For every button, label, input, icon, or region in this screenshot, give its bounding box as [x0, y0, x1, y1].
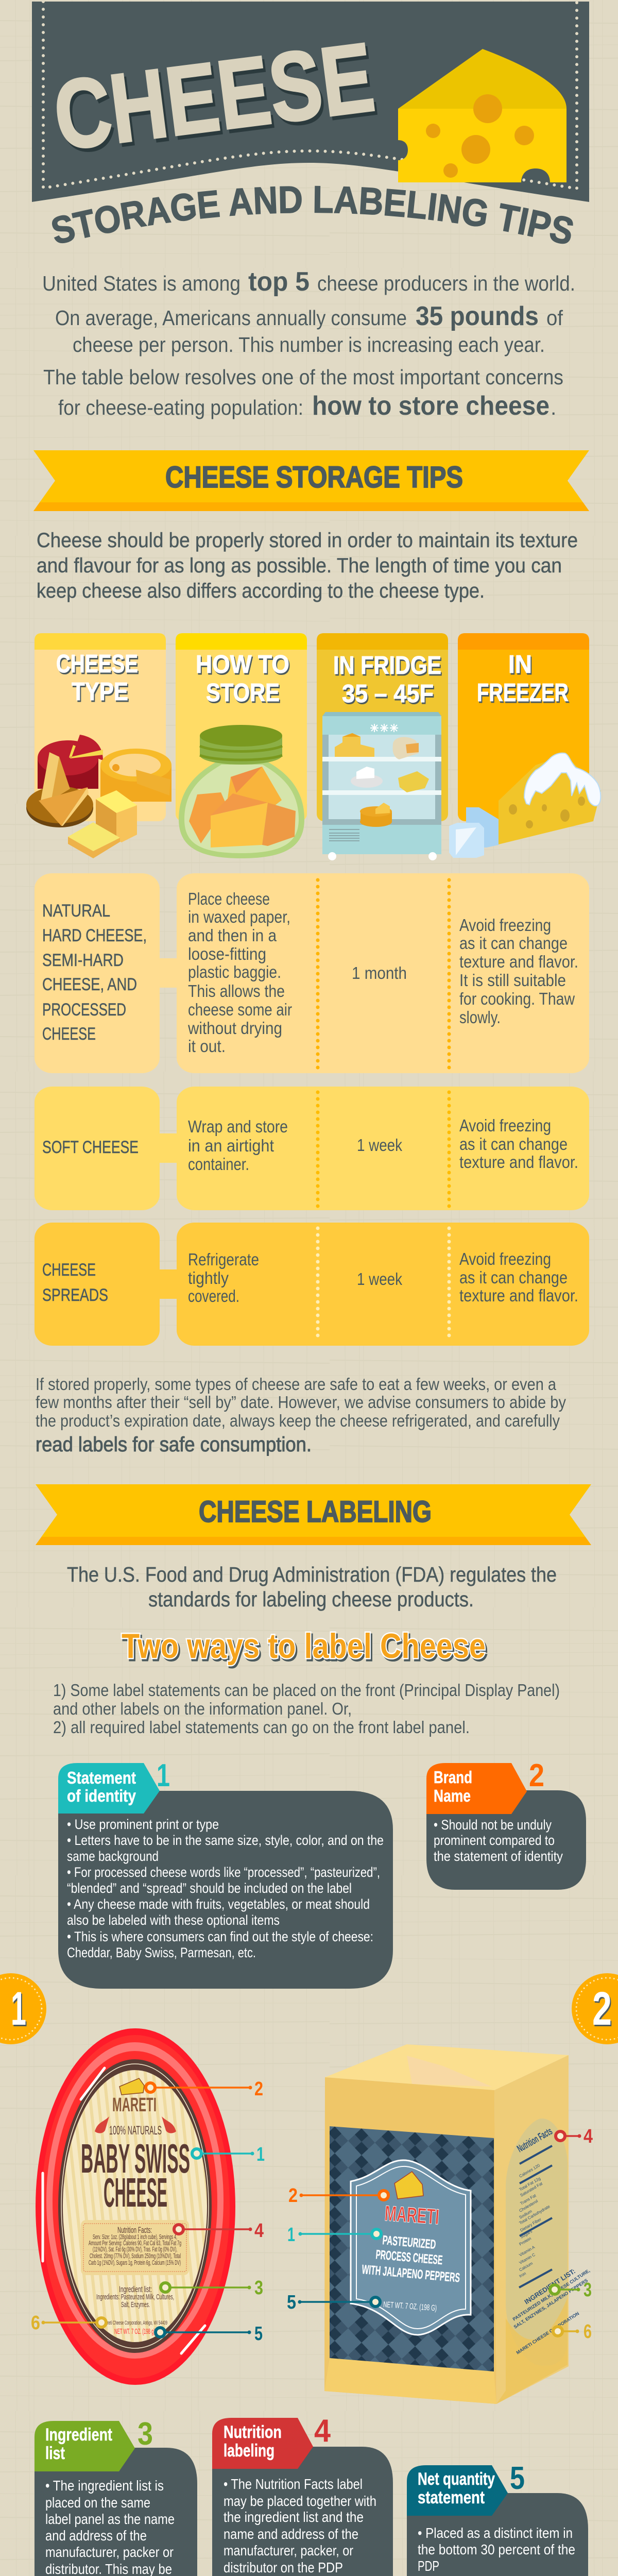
nutrition box: [81, 2220, 189, 2275]
ingredient list: Salt, Enzymes.: [121, 2300, 150, 2309]
body text: [67, 1817, 384, 1960]
markers: cheese block: [287, 2126, 593, 2343]
panel: ingredient list: [35, 2416, 197, 2576]
intro text: cheese producers in the world.: [317, 272, 575, 295]
how to store cell: cheese some air: [188, 1000, 292, 1019]
side panel: nutrition and ingredients: Total Carbohydrate: [518, 2204, 551, 2226]
markers: round label: [31, 2078, 265, 2345]
intro text: how to store cheese: [312, 391, 550, 421]
markers: cheese block: 2: [288, 2185, 298, 2207]
front label: WITH JALAPENO PEPPERS: [361, 2262, 460, 2285]
how to store cell: [188, 1117, 288, 1174]
body text: • Use prominent print or type: [67, 1817, 219, 1832]
nutrition box: Cholest. 20mg (77% DV), Sodium 250mg (10%DV), Total: [90, 2252, 181, 2260]
side panel: nutrition and ingredients: Sodium: [518, 2209, 533, 2220]
how to store cell: covered.: [188, 1286, 239, 1306]
intro text: top 5: [248, 267, 310, 297]
icon: fridge with cheese: [322, 712, 441, 860]
how to store cell: in an airtight: [188, 1136, 274, 1155]
storage paragraph: [37, 529, 578, 602]
100% naturals: [95, 2116, 176, 2138]
tag: Name: [434, 1786, 471, 1805]
side panel: nutrition and ingredients: Calories 120: [518, 2163, 541, 2179]
nutrition box: Amount Per Serving: Calories 90, Fat Cal 63, Total Fat 7g: [89, 2239, 181, 2247]
panel: statement of identity: [58, 1758, 393, 1989]
nutrition box: Nutrition Facts:: [117, 2225, 152, 2235]
panel: nutrition labeling: [212, 2413, 393, 2576]
body text: may be placed together with: [224, 2493, 376, 2509]
freezer cell: Avoid freezing: [459, 916, 551, 935]
body text: • Should not be unduly: [434, 1817, 552, 1833]
body text: • The Nutrition Facts label: [224, 2476, 363, 2492]
markers: round label: 5: [254, 2323, 263, 2345]
product name: CHEESE: [104, 2170, 167, 2215]
cheese type cell: [42, 1260, 108, 1305]
how to store cell: container.: [188, 1155, 249, 1174]
table column: in freezer: [449, 633, 601, 858]
intro text: 35 pounds: [416, 301, 539, 331]
side panel: nutrition and ingredients: Cholesterol: [518, 2199, 539, 2213]
body text: PDP: [418, 2558, 439, 2574]
freezer cell: slowly.: [459, 1008, 501, 1027]
ribbon: cheese storage tips: [33, 450, 589, 511]
side panel: nutrition and ingredients: Sugars: [519, 2229, 533, 2240]
body text: name and address of the: [224, 2526, 358, 2542]
cheese type cell: HARD CHEESE,: [42, 926, 147, 945]
side panel: nutrition and ingredients: Iron: [518, 2271, 527, 2279]
cheese type cell: CHEESE, AND: [42, 975, 137, 994]
FDA text: [67, 1563, 557, 1611]
heading: CHEESE: [56, 650, 138, 678]
freezer cell: [459, 1249, 578, 1305]
icon: cheese wedge: [398, 49, 566, 182]
two ways list: [53, 1681, 560, 1737]
tag: list: [45, 2444, 65, 2463]
nutrition box: Serv. Size: 1oz. (28g/about 1 inch cube), Servings 4,: [93, 2233, 177, 2241]
side panel: nutrition and ingredients: MARETI CHEESE CORPORATION: [516, 2311, 580, 2355]
cheese type cell: NATURAL: [42, 901, 110, 921]
body text: prominent compared to: [434, 1833, 555, 1848]
100% naturals: 100% NATURALS: [109, 2124, 162, 2138]
side panel: nutrition and ingredients: Nutrition Facts: [515, 2126, 554, 2155]
FDA text: standards for labeling cheese products.: [148, 1587, 474, 1611]
heading: HOW TO: [196, 651, 289, 679]
cheese type cell: CHEESE: [42, 1024, 96, 1044]
freezer cell: as it can change: [459, 934, 568, 953]
heading: TYPE: [72, 678, 128, 706]
freezer cell: texture and flavor.: [459, 952, 578, 971]
how to store cell: without drying: [187, 1019, 282, 1038]
body text: manufacturer, packer, or: [224, 2543, 353, 2558]
badge: number 2: 2: [592, 1982, 612, 2035]
body text: the statement of identity: [434, 1849, 563, 1864]
freezer cell: Avoid freezing: [459, 1116, 551, 1135]
storage note: If stored properly, some types of cheese are safe to eat a few weeks, or even a: [36, 1375, 557, 1394]
markers: round label: 6: [31, 2312, 40, 2334]
cheese type cell: CHEESE: [42, 1260, 96, 1280]
subtitle: STORAGE AND LABELING TIPS: [52, 185, 573, 244]
heading: [196, 651, 289, 707]
markers: round label: 3: [254, 2277, 263, 2299]
freezer cell: texture and flavor.: [459, 1286, 578, 1305]
ingredient list: Ingredients: Pasteurized Milk, Cultures,: [96, 2293, 174, 2301]
freezer cell: [459, 1116, 578, 1172]
freezer cell: as it can change: [459, 1134, 568, 1154]
freezer cell: as it can change: [459, 1268, 568, 1287]
how to store cell: and then in a: [188, 926, 277, 945]
body text: [224, 2476, 376, 2576]
storage paragraph: keep cheese also differs according to the cheese type.: [37, 580, 485, 602]
side panel: nutrition and ingredients: SALT, ENZYMES, JALAPENO PEPPERS: [513, 2278, 589, 2330]
intro text: of: [546, 306, 563, 330]
body text: placed on the same: [45, 2495, 150, 2511]
ribbon: cheese labeling: [36, 1484, 591, 1545]
markers: cheese block: 5: [287, 2292, 296, 2313]
body text: • This is where consumers can find out the style of cheese:: [67, 1929, 373, 1944]
how to store cell: it out.: [188, 1037, 226, 1056]
fridge cell: 1 week: [357, 1136, 402, 1155]
body text: • The ingredient list is: [45, 2478, 164, 2494]
storage note: read labels for safe consumption.: [36, 1433, 312, 1456]
brand: MARETI: [112, 2094, 157, 2116]
storage paragraph: Cheese should be properly stored in order to maintain its texture: [37, 529, 578, 552]
heading: [56, 650, 138, 706]
FDA text: The U.S. Food and Drug Administration (FDA) regulates the: [67, 1563, 557, 1586]
table column: cheese type: [26, 633, 171, 858]
freezer cell: [459, 916, 578, 1027]
tag: [407, 2465, 508, 2516]
product name: [81, 2136, 190, 2215]
how to store cell: Wrap and store: [188, 1117, 288, 1136]
body text: label panel as the name: [45, 2511, 175, 2527]
freezer cell: texture and flavor.: [459, 1153, 578, 1172]
body text: the ingredient list and the: [224, 2509, 364, 2525]
panel: net quantity statement: [407, 2461, 588, 2576]
heading: two ways to label cheese: Two ways to label Cheese: [122, 1626, 486, 1666]
how to store cell: in waxed paper,: [188, 907, 290, 926]
address and net weight: [103, 2320, 167, 2336]
body text: [434, 1817, 563, 1864]
front label: MARETI: [384, 2201, 440, 2229]
heading: 35 – 45F: [342, 680, 434, 708]
heading: [477, 651, 569, 707]
title: cheese: CHEESE: [48, 22, 380, 171]
tag: of identity: [67, 1786, 136, 1805]
header banner: [32, 2, 589, 202]
body text: Cheddar, Baby Swiss, Parmesan, etc.: [67, 1945, 256, 1960]
markers: round label: 4: [254, 2220, 264, 2242]
markers: cheese block: 1: [287, 2224, 295, 2246]
body text: also be labeled with these optional items: [67, 1912, 280, 1928]
how to store cell: tightly: [188, 1268, 229, 1287]
body text: distributor on the PDP: [224, 2560, 343, 2575]
body text: • Any cheese made with fruits, vegetables, or meat should: [67, 1896, 370, 1912]
side panel: nutrition and ingredients: Vitamin C: [518, 2252, 536, 2265]
body text: • For processed cheese words like “processed”, “pasteurized”,: [67, 1865, 380, 1880]
how to store cell: loose-fitting: [188, 944, 266, 963]
body text: same background: [67, 1849, 159, 1864]
side panel: nutrition and ingredients: Saturated Fat: [519, 2181, 544, 2198]
number 5: 5: [510, 2461, 525, 2496]
icon: assorted cheeses: [26, 735, 171, 858]
row: cheese spreads: [35, 1223, 589, 1346]
intro text: cheese per person. This number is increasing each year.: [73, 333, 545, 357]
storage note: [36, 1375, 566, 1456]
number 1: 1: [157, 1758, 170, 1793]
body text: the bottom 30 percent of the: [418, 2541, 575, 2557]
intro text: The table below resolves one of the most important concerns: [43, 365, 563, 389]
row: soft cheese: [35, 1087, 589, 1210]
tag: Ingredient: [45, 2425, 112, 2445]
label illustration: round baby swiss: [36, 2028, 235, 2385]
cheese type cell: SEMI-HARD: [42, 951, 124, 970]
side panel: nutrition and ingredients: Calcium: [518, 2261, 534, 2273]
heading: FREEZER: [477, 679, 569, 707]
number 4: 4: [314, 2413, 331, 2449]
row: natural hard cheese: [35, 873, 589, 1073]
body text: [418, 2525, 577, 2576]
tag: [58, 1763, 160, 1814]
ingredient list: [96, 2284, 174, 2309]
side panel: nutrition and ingredients: Protein: [518, 2236, 532, 2247]
side panel: nutrition and ingredients: Trans Fat: [519, 2193, 537, 2206]
cheese type cell: PROCESSED: [42, 1000, 126, 1020]
front label: PROCESS CHEESE: [375, 2247, 443, 2267]
cheese type cell: [42, 901, 147, 1044]
side panel: nutrition and ingredients: [496, 2119, 591, 2404]
logo: cheese: [119, 2078, 144, 2095]
badge: number 1: [0, 1973, 46, 2044]
tag: Net quantity: [418, 2469, 495, 2489]
markers: round label: 1: [256, 2144, 265, 2165]
two ways list: and other labels on the information panel. Or,: [53, 1699, 352, 1718]
side panel: nutrition and ingredients: Vitamin A: [518, 2245, 536, 2258]
tag: Brand: [434, 1768, 472, 1787]
storage paragraph: and flavour for as long as possible. The length of time you can: [37, 554, 562, 577]
intro text: United States is among: [42, 272, 241, 295]
nutrition box: Carb 1g (1%DV), Sugars 1g, Protein 6g, Calcium (15% DV): [89, 2259, 181, 2266]
number 3: 3: [138, 2416, 153, 2452]
tag: labeling: [224, 2441, 274, 2461]
badge: number 1: 1: [11, 1982, 26, 2035]
front label: [351, 2160, 471, 2335]
ribbon: cheese storage tips: CHEESE STORAGE TIPS: [165, 461, 463, 494]
ingredient list: Ingredient list:: [119, 2284, 152, 2294]
tag: [426, 1763, 527, 1814]
tag: [212, 2418, 313, 2469]
tag: Statement: [67, 1768, 136, 1787]
intro text: for cheese-eating population:: [58, 396, 303, 419]
intro text: .: [551, 396, 556, 419]
two ways list: 2) all required label statements can go on the front label panel.: [53, 1718, 470, 1737]
body text: • Placed as a distinct item in: [418, 2525, 573, 2541]
heading: [333, 652, 441, 708]
address and net weight: Mareti Cheese Corporation, Antigo, WI 54409: [103, 2320, 167, 2326]
side panel: nutrition and ingredients: INGREDIENT LIST:: [523, 2267, 577, 2306]
icon: jar of cheese: [179, 725, 304, 858]
how to store cell: This allows the: [188, 981, 285, 1001]
panel: brand name: [426, 1758, 586, 1890]
how to store cell: [188, 1250, 259, 1306]
side panel: nutrition and ingredients: Total Fat 12g: [518, 2176, 541, 2192]
plaid panel: [330, 2126, 494, 2371]
label illustration: cheese block: [324, 2044, 591, 2404]
cheese type cell: SOFT CHEESE: [42, 1138, 139, 1157]
tag: [35, 2421, 135, 2471]
heading: IN: [508, 651, 532, 679]
body text: and address of the: [45, 2528, 147, 2544]
label illustration: round baby swiss: BABY SWISS: [81, 2136, 190, 2181]
badge: number 2: [572, 1973, 618, 2044]
heading: STORE: [206, 679, 280, 707]
body text: manufacturer, packer or: [45, 2544, 174, 2560]
markers: cheese block: 4: [583, 2126, 593, 2147]
markers: cheese block: 6: [583, 2321, 592, 2343]
markers: cheese block: 3: [583, 2279, 592, 2301]
how to store cell: Refrigerate: [188, 1250, 259, 1269]
number 2: 2: [529, 1758, 544, 1793]
nutrition box: (11%DV), Sat. Fat 6g (30% DV), Tras. Fat 0g (0% DV),: [93, 2245, 177, 2253]
freezer cell: for cooking. Thaw: [459, 989, 575, 1008]
intro text: [42, 267, 575, 421]
tag: statement: [418, 2488, 485, 2507]
front label: PASTEURIZED: [382, 2233, 437, 2252]
side panel: nutrition and ingredients: Dietary Fiber: [519, 2217, 542, 2233]
freezer cell: Avoid freezing: [459, 1249, 551, 1268]
body text: • Letters have to be in the same size, style, color, and on the: [67, 1833, 384, 1848]
tag: Nutrition: [224, 2422, 282, 2442]
table column: how to store: [176, 633, 307, 858]
cheese type cell: SPREADS: [42, 1285, 108, 1305]
how to store cell: [187, 889, 292, 1056]
side panel: nutrition and ingredients: PASTEURIZED MILK, CHEESE CULTURE,: [512, 2268, 591, 2322]
fridge cell: 1 week: [357, 1269, 402, 1289]
fridge cell: 1 month: [352, 963, 407, 982]
freezer cell: It is still suitable: [459, 971, 566, 990]
icon: frozen cheese and ice: [449, 753, 601, 858]
address and net weight: NET WT. 7 OZ. (198 g): [114, 2327, 155, 2336]
how to store cell: Place cheese: [188, 889, 270, 908]
body text: [45, 2478, 175, 2576]
front label: NET WT. 7 OZ. (198 G): [383, 2300, 437, 2313]
body text: “blended” and “spread” should be included on the label: [67, 1880, 352, 1896]
heading: IN FRIDGE: [333, 652, 441, 680]
ribbon: cheese labeling: CHEESE LABELING: [199, 1495, 432, 1529]
table column: in fridge: [317, 633, 448, 860]
intro text: On average, Americans annually consume: [55, 306, 407, 330]
markers: round label: 2: [254, 2078, 263, 2100]
how to store cell: plastic baggie.: [188, 962, 281, 981]
